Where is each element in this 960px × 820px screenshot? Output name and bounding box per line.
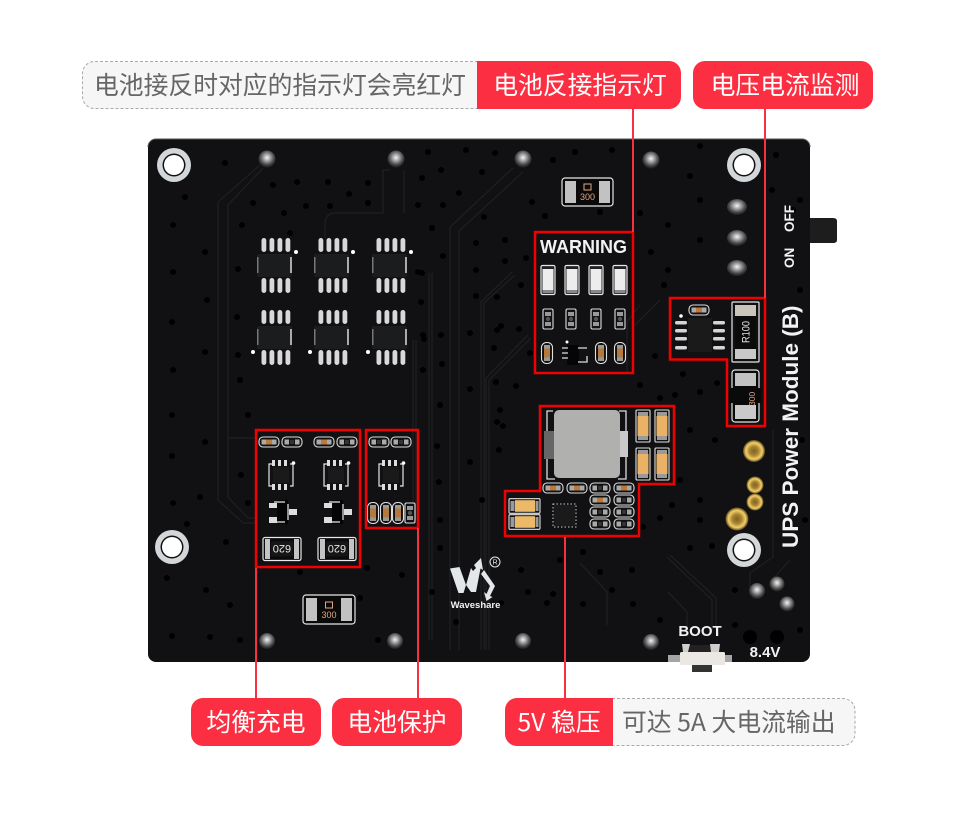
highlight: voltage monitor box	[670, 298, 765, 426]
icon: fuse bottom: 300	[321, 610, 337, 620]
callout: 5V label	[505, 698, 613, 746]
highlight: 5V regulator box	[505, 406, 674, 536]
icon: mounting holes	[155, 148, 761, 567]
R100 shunt resistor: R100	[740, 321, 752, 343]
panel: reverse warning LEDs	[540, 237, 627, 365]
icon: boot button	[668, 623, 732, 672]
warning label: WARNING	[540, 237, 627, 257]
icon: gold pins	[726, 440, 765, 530]
chart: six SOIC8 chips	[251, 238, 413, 365]
arrow: connector lines	[256, 108, 765, 698]
text: 8.4V test points	[743, 630, 784, 661]
icon: fuse top: 300	[580, 192, 595, 202]
icon: Waveshare logo	[450, 557, 500, 611]
highlight: protection box	[366, 430, 418, 528]
panel: battery protection parts	[368, 437, 415, 524]
text: 8.4V test points: 8.4V	[750, 644, 780, 661]
callout: 5V description	[612, 698, 855, 746]
panel: PCB board	[148, 139, 810, 662]
capacitors and regulator	[542, 340, 626, 365]
text: ON OFF: ON	[782, 248, 797, 268]
callout: reverse indicator label	[477, 61, 681, 109]
callout: 5V description: 可达 5A 大电流输出	[622, 703, 836, 739]
callout: reverse indicator description: 电池接反时对应的指示灯会亮红灯	[94, 66, 466, 102]
620 resistors: 620	[328, 542, 346, 554]
callout: protection label: 电池保护	[347, 703, 447, 739]
text: ON OFF	[782, 205, 797, 268]
callout: protection label	[332, 698, 462, 746]
callout: voltage current label	[693, 61, 873, 109]
callout: balancing label	[191, 698, 321, 746]
callout: balancing label: 均衡充电	[206, 703, 306, 739]
icon: Waveshare logo: Waveshare	[451, 600, 500, 611]
inductor	[544, 410, 628, 479]
callout: reverse indicator label: 电池反接指示灯	[493, 66, 667, 102]
icon: fuse top	[562, 178, 613, 206]
icon: solder joints	[258, 150, 794, 650]
fuse vertical: 300	[747, 392, 757, 406]
resistors	[543, 309, 625, 329]
panel: balancing charge parts	[259, 437, 357, 560]
callout: 5V label: 5V 稳压	[517, 703, 601, 739]
callout: voltage current label: 电压电流监测	[711, 66, 859, 102]
icon: fuse bottom	[303, 595, 355, 624]
icon: power switch	[810, 218, 837, 243]
small passives	[543, 483, 634, 529]
LEDs	[541, 266, 627, 294]
capacitors	[636, 410, 669, 480]
text: module name: UPS Power Module (B)	[778, 305, 803, 548]
620 resistors	[263, 538, 356, 560]
QFN controller	[553, 504, 576, 527]
highlight: reverse warning box	[535, 232, 633, 373]
text: ON OFF: OFF	[782, 205, 797, 232]
panel: 5V regulator parts	[509, 410, 669, 529]
panel: voltage current monitor parts	[675, 302, 761, 422]
highlight: balancing box	[256, 430, 360, 567]
icon: Waveshare logo: R	[492, 560, 498, 566]
620 resistors: 620	[273, 542, 291, 554]
icon: boot button: BOOT	[678, 623, 722, 640]
